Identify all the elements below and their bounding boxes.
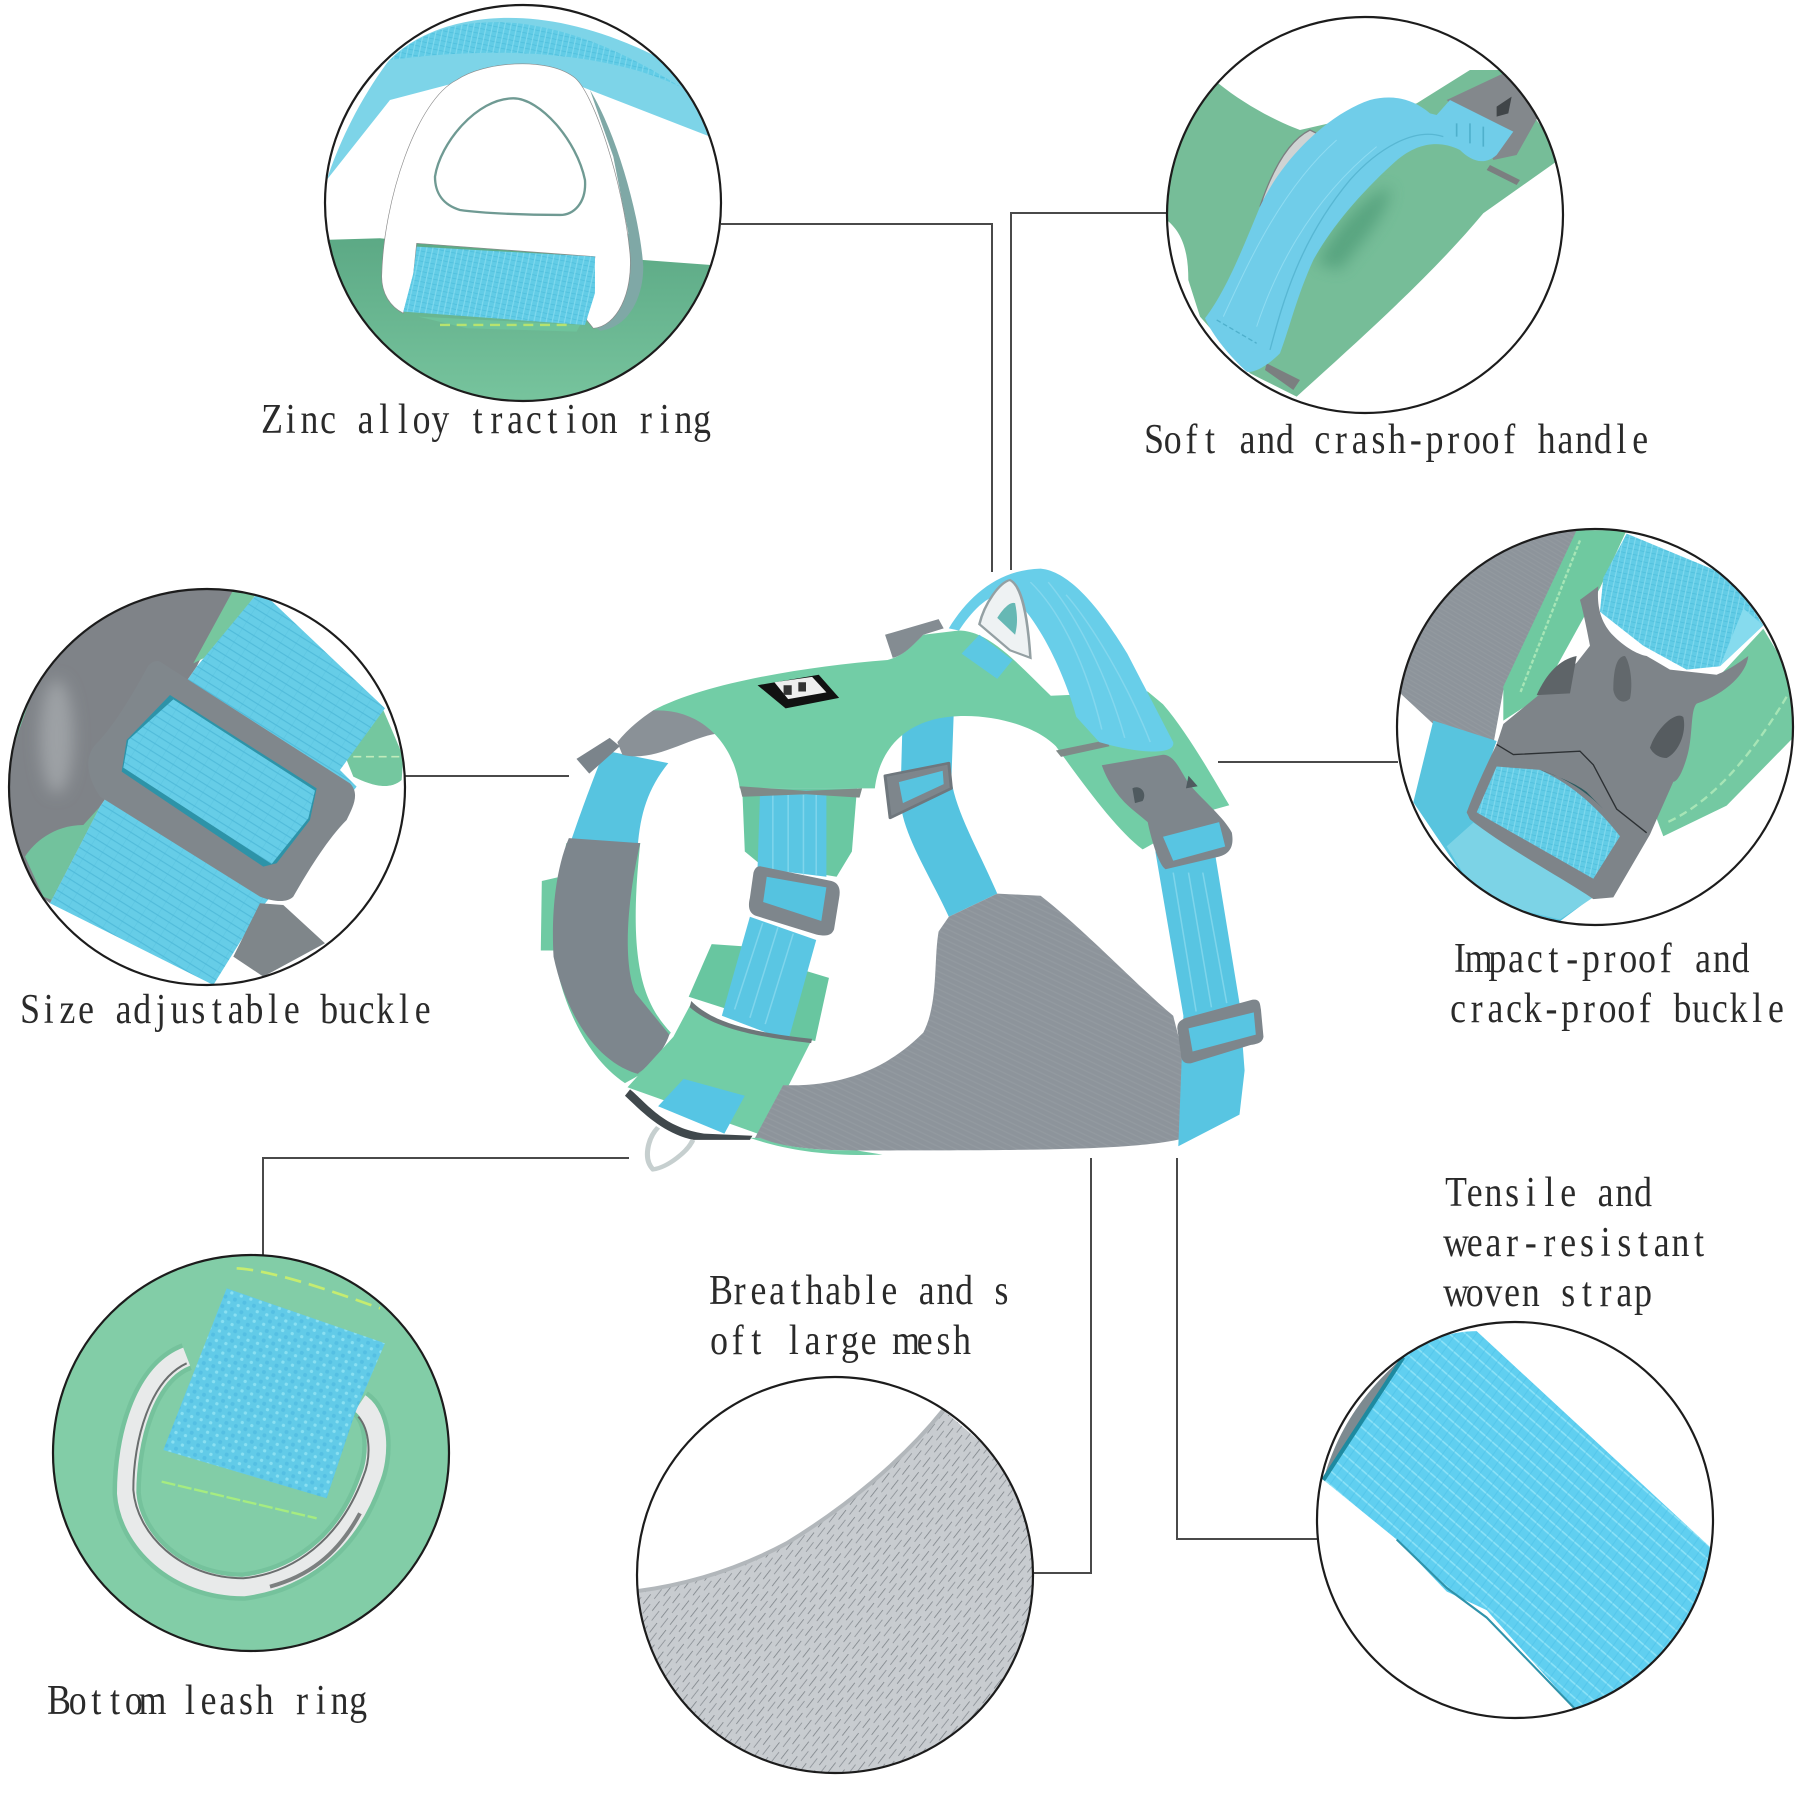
- left padded section: [541, 843, 671, 1083]
- label: Impact-proof and: [1454, 935, 1750, 982]
- detail photo: adjustable buckle: [10, 590, 403, 984]
- detail photo: traction ring: [328, 18, 710, 400]
- logo tag: [758, 675, 839, 708]
- panel: bottom leash ring: [48, 1254, 450, 1723]
- back strap: [900, 708, 997, 917]
- right strap: [1155, 847, 1245, 1146]
- mesh back panel: [755, 894, 1186, 1150]
- main green body: [653, 631, 1229, 849]
- panel: impact-proof buckle: [1380, 520, 1800, 1032]
- chest slider: [749, 866, 840, 936]
- label: Bottom leash ring: [47, 1677, 367, 1724]
- label: [1450, 935, 1784, 1032]
- detail photo: release buckle: [1401, 530, 1792, 921]
- left loop strap: [569, 750, 668, 847]
- center chest strap: [742, 788, 857, 877]
- label: [1443, 1169, 1704, 1316]
- label: crack-proof buckle: [1450, 985, 1784, 1032]
- label: Tensile and: [1445, 1169, 1652, 1216]
- label: wear-resistant: [1443, 1219, 1704, 1266]
- label: oft large mesh: [710, 1317, 971, 1364]
- detail photo: handle: [1168, 70, 1555, 397]
- connector lines: [263, 213, 1398, 1573]
- label: Breathable and s: [709, 1267, 1008, 1314]
- bottom D ring: [647, 1127, 693, 1169]
- traction ring: [979, 580, 1030, 658]
- label: Size adjustable buckle: [20, 986, 431, 1033]
- panel: soft handle: [1144, 0, 1648, 463]
- panel: breathable mesh: [636, 1274, 1034, 1774]
- detail photo: D ring: [54, 1256, 448, 1650]
- right slider: [1177, 1000, 1263, 1063]
- front green band: [628, 1003, 811, 1134]
- side release buckle: [1102, 755, 1232, 869]
- label: Soft and crash-proof handle: [1144, 416, 1648, 463]
- detail photo: strap: [1322, 1331, 1710, 1708]
- padded handle: [949, 569, 1173, 752]
- label: woven strap: [1443, 1269, 1652, 1316]
- panel: zinc alloy traction ring: [261, 0, 750, 443]
- panel: size adjustable buckle: [0, 580, 450, 1033]
- lower strap: [658, 1079, 745, 1134]
- label: [709, 1267, 1008, 1364]
- detail photo: mesh: [638, 1409, 1032, 1772]
- central harness product: [541, 569, 1263, 1169]
- panel: woven strap: [1316, 1176, 1714, 1720]
- label: Zinc alloy traction ring: [261, 396, 711, 443]
